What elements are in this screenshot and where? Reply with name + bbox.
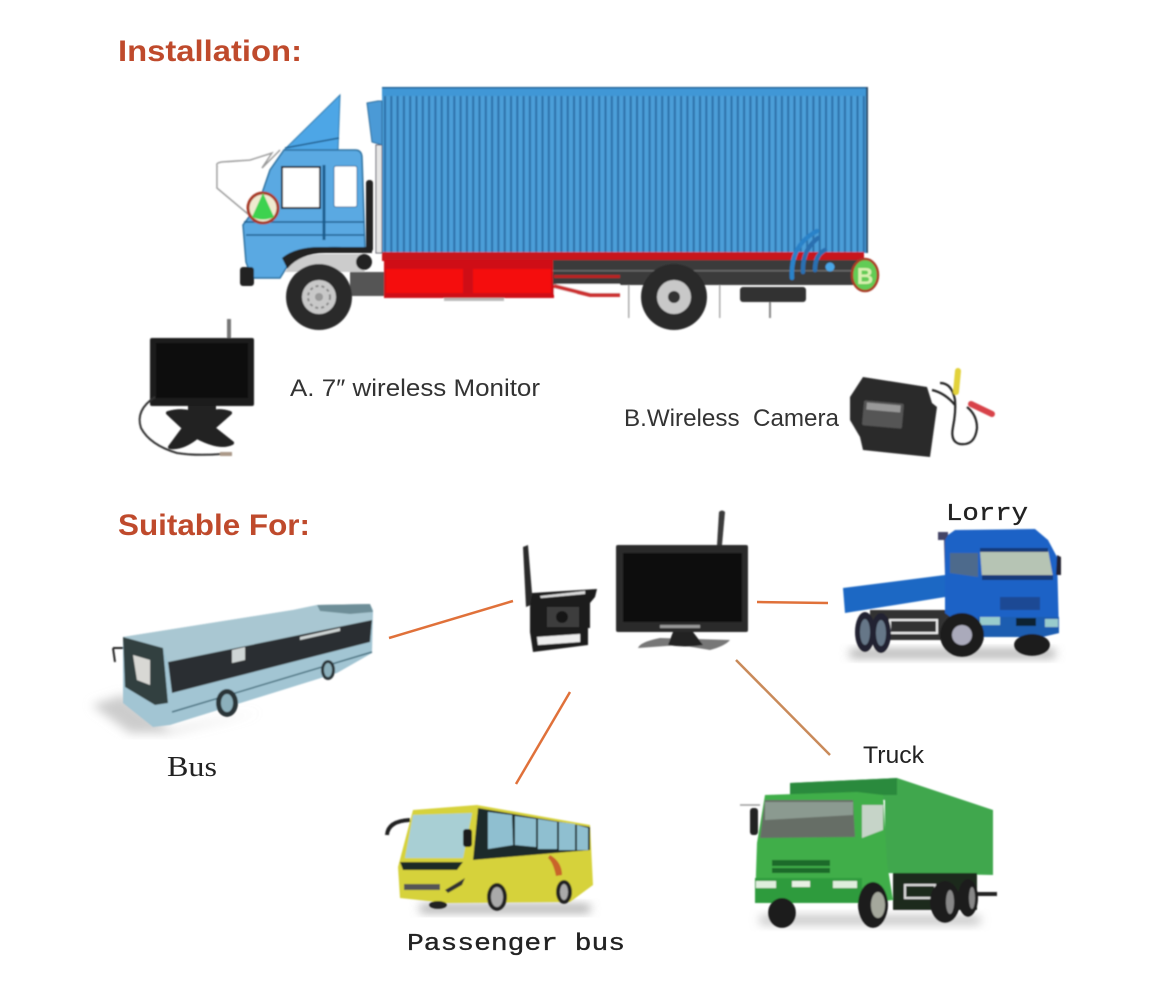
cab exhaust and ladder	[366, 101, 382, 253]
label: Passenger bus: Passenger bus	[407, 931, 625, 958]
product: 7 inch monitor small	[140, 319, 254, 456]
heading: Suitable For: Suitable For:	[118, 509, 310, 542]
connector lines	[389, 601, 830, 784]
label: Bus: Bus	[167, 752, 217, 783]
vehicle: truck	[740, 778, 997, 928]
vehicle: lorry	[843, 529, 1061, 657]
marker A	[248, 193, 278, 223]
label: Lorry: Lorry	[946, 501, 1028, 528]
vehicle: bus	[92, 604, 373, 733]
product: monitor large	[616, 510, 748, 650]
label: camera: B.Wireless Camera	[624, 405, 840, 432]
mirror frame outline	[217, 150, 280, 214]
cab	[240, 95, 384, 296]
product: wireless camera large	[523, 545, 597, 652]
vehicle: passenger bus	[387, 805, 593, 912]
red side skirt	[382, 252, 864, 298]
heading: Installation: Installation:	[118, 35, 302, 68]
chassis	[444, 260, 863, 318]
label: Truck: Truck	[863, 742, 925, 769]
illustration: blue box truck	[217, 87, 878, 330]
marker B	[852, 259, 878, 291]
wireless signal icon	[792, 231, 834, 278]
rear wheel	[641, 264, 707, 330]
label: monitor: A. 7″ wireless Monitor	[290, 375, 540, 402]
front wheel	[286, 264, 352, 330]
marker B: B	[857, 263, 873, 289]
cargo box	[382, 87, 868, 253]
product: wireless camera small	[850, 371, 992, 457]
